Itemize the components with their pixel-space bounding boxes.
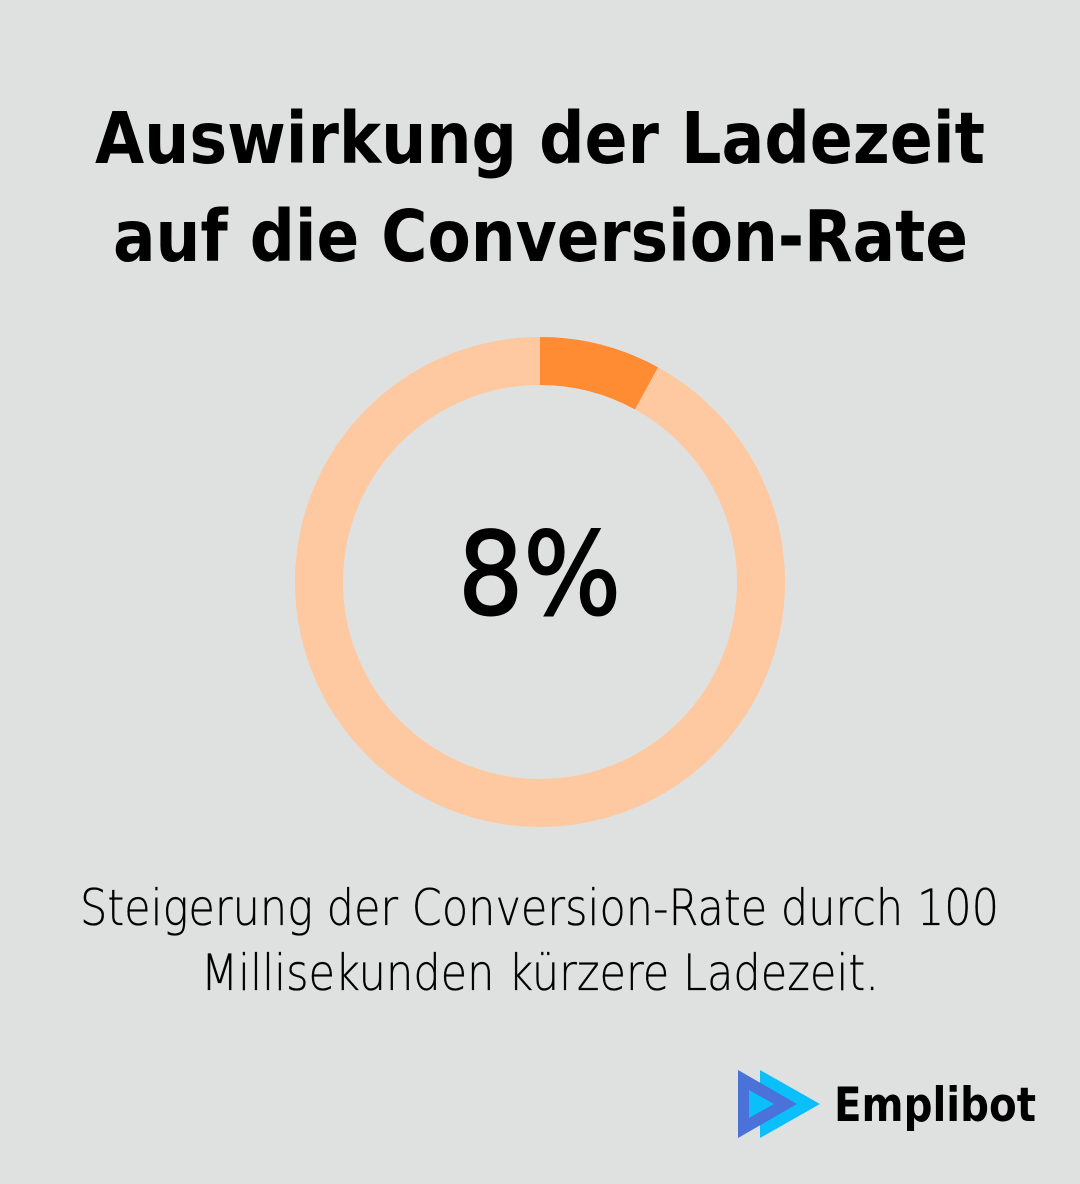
highlighted segment: 8%	[540, 337, 658, 409]
logo: Emplibot	[738, 1070, 1036, 1138]
title: auf die Conversion-Rate	[113, 195, 968, 278]
description text	[80, 879, 999, 1002]
icon: play triangles	[738, 1070, 820, 1138]
title: Auswirkung der Ladezeit	[95, 97, 985, 180]
description text: Millisekunden kürzere Ladezeit.	[201, 944, 879, 1002]
title	[95, 97, 985, 278]
center value: 8%	[458, 508, 621, 641]
logo wordmark: Emplibot	[834, 1078, 1036, 1133]
donut chart: 8%	[319, 337, 761, 803]
